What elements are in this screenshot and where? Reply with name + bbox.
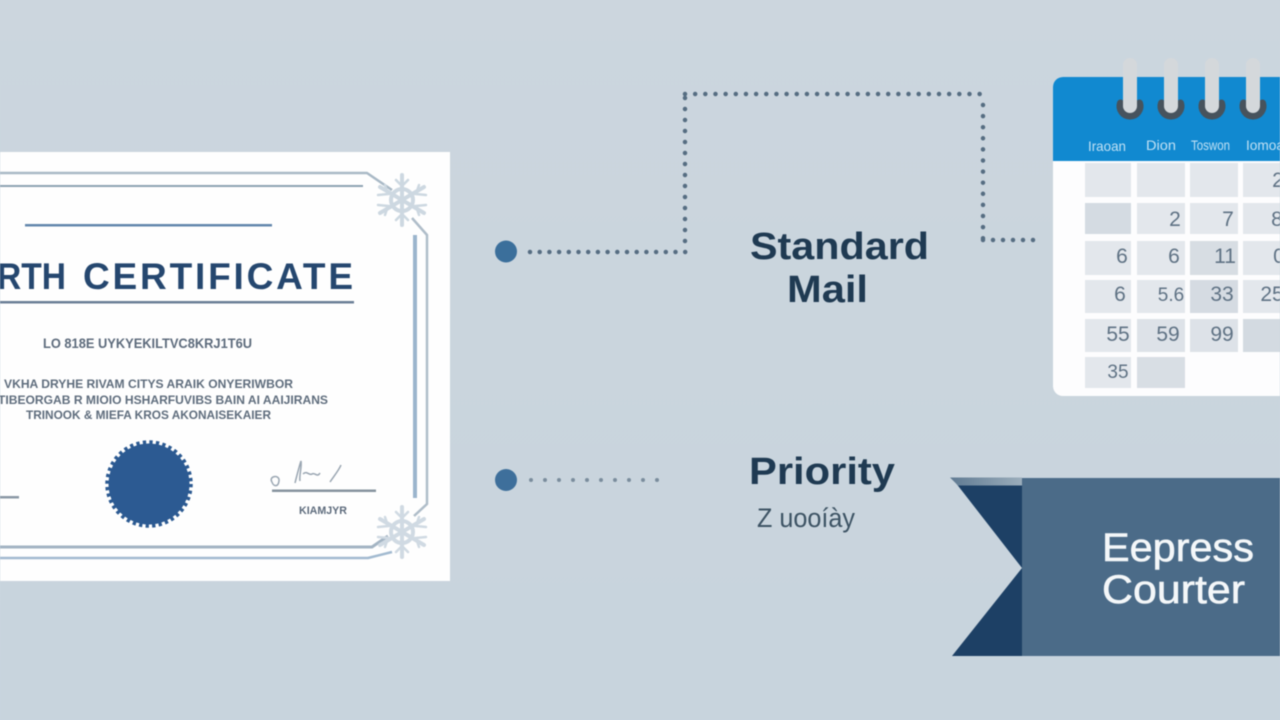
connector: standard mail route to calendar (495, 94, 1034, 262)
signatory label: KIAMJYR (299, 505, 347, 517)
ribbon label: Courter (1102, 568, 1245, 612)
label: standard mail: Mail (787, 269, 868, 311)
calendar dates: 99 (1210, 323, 1234, 346)
certificate title: CERTIFICATE (83, 256, 353, 297)
calendar grid cells (1085, 163, 1280, 388)
panel: birth certificate (0, 152, 450, 581)
calendar weekday labels (1088, 137, 1280, 154)
certificate body text: TIBEORGAB R MIOIO HSHARFUVIBS BAIN AI AAIJIRANS (0, 395, 328, 407)
label: standard mail (750, 226, 929, 311)
label: priority (749, 451, 895, 533)
certificate title underline (0, 301, 354, 304)
ribbon label (1102, 526, 1254, 612)
certificate body text: TRINOOK & MIEFA KROS AKONAISEKAIER (26, 410, 272, 422)
panel: calendar (1053, 58, 1280, 396)
panel: express courier ribbon (950, 478, 1280, 656)
ribbon label: Eepress (1102, 526, 1254, 570)
calendar dates: 2 (1169, 208, 1181, 231)
certificate subtitle: LO 818E UYKYEKILTVC8KRJ1T6U (43, 335, 252, 351)
ribbon tail highlight (950, 478, 1022, 486)
calendar dates: 6 (1114, 283, 1126, 306)
signature scribble (271, 461, 341, 486)
icon: blue seal (108, 442, 190, 526)
calendar dates: 6 (1168, 245, 1180, 268)
certificate body text: VKHA DRYHE RIVAM CITYS ARAIK ONYERIWBOR (4, 379, 294, 391)
calendar dates: 55 (1106, 323, 1130, 346)
calendar binding rings (1120, 58, 1263, 116)
connector: priority route (495, 469, 660, 491)
label: priority: Priority (749, 451, 895, 493)
ribbon body (1022, 478, 1280, 656)
calendar weekday labels: Iraoan (1088, 138, 1126, 154)
icon: bottom snowflake ornament (378, 507, 426, 557)
calendar dates: 5.6 (1158, 285, 1184, 306)
signature line (272, 490, 376, 492)
calendar dates: 35 (1107, 362, 1129, 383)
calendar weekday labels: Toswon (1191, 137, 1230, 153)
calendar dates: 7 (1222, 208, 1234, 231)
calendar dates (1106, 169, 1280, 383)
calendar dates: 11 (1214, 245, 1236, 268)
icon: top snowflake ornament (378, 175, 426, 225)
calendar dates: 6 (1116, 245, 1128, 268)
left signature line (0, 496, 19, 498)
calendar dates: 33 (1210, 283, 1234, 306)
calendar dates: 59 (1156, 323, 1180, 346)
calendar weekday labels: Dion (1146, 137, 1176, 153)
priority duration: Z uooíày (757, 503, 855, 533)
label: standard mail: Standard (750, 226, 929, 268)
calendar header (1053, 77, 1280, 161)
certificate title rule (25, 224, 272, 226)
certificate body text (0, 379, 328, 422)
ribbon tail (952, 478, 1022, 656)
certificate ornamental border (0, 173, 427, 558)
